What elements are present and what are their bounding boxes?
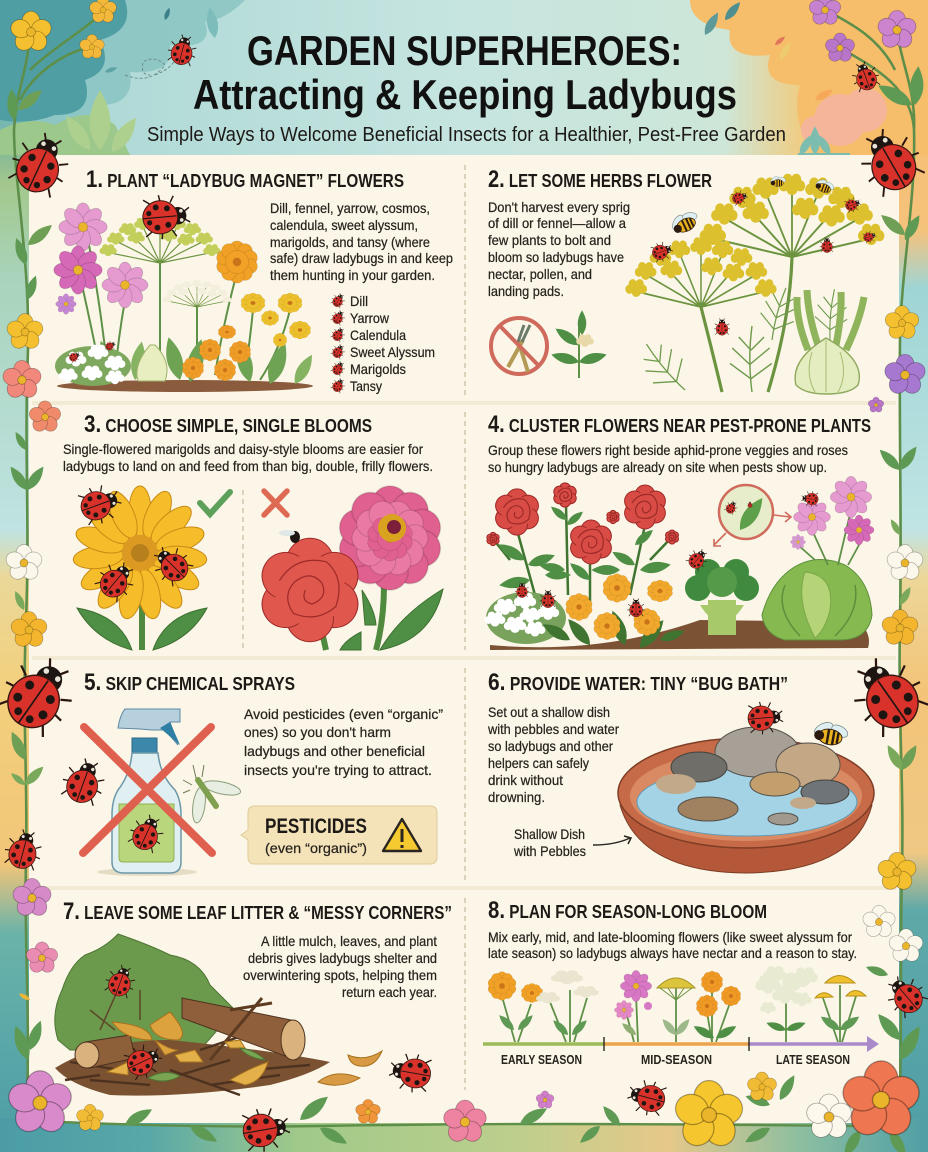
body text 3: ladybugs to land on and feed from than big, double, frilly flowers. [63, 458, 433, 474]
heading 3: 3. CHOOSE SIMPLE, SINGLE BLOOMS [84, 411, 372, 438]
body text 1: Dill, fennel, yarrow, cosmos, [270, 200, 430, 216]
body text 2 [488, 199, 630, 299]
body text 8 [488, 929, 857, 961]
body text 6: drowning. [488, 789, 545, 805]
body text 7: debris gives ladybugs shelter and [248, 950, 437, 966]
body text 6: with pebbles and water [487, 721, 619, 737]
callout: pesticides label [241, 806, 437, 864]
section dividers [464, 165, 466, 1090]
season timeline [483, 1036, 879, 1067]
flower list: Sweet Alyssum [350, 344, 435, 360]
flower list: Tansy [350, 378, 382, 394]
body text 5: insects you're trying to attract. [244, 762, 432, 778]
foliage: top left [0, 0, 245, 156]
panel 5: skip sprays [57, 669, 443, 876]
illustration: early season flowers [487, 970, 599, 1042]
border: bottom vine [60, 1073, 910, 1152]
panel 8: season-long bloom [483, 897, 879, 1067]
season timeline: LATE SEASON [776, 1052, 850, 1067]
body text 2: landing pads. [488, 283, 564, 299]
body text 5: ones) so you don't harm [244, 724, 391, 740]
panel 2: let herbs flower [488, 166, 884, 403]
title: Attracting & Keeping Ladybugs [193, 71, 737, 118]
heading 7: 7. LEAVE SOME LEAF LITTER & “MESSY CORNERS” [63, 898, 452, 925]
body text 8: late season) so ladybugs always have nectar and a reason to stay. [488, 945, 857, 961]
cream content panel [29, 155, 899, 1123]
body text 2: few plants to bolt and [488, 232, 611, 248]
panel 6: provide water [487, 669, 874, 873]
body text 1: marigolds, and tansy (where [270, 234, 430, 250]
body text 6: drink without [488, 772, 563, 788]
body text 1: calendula, sweet alyssum, [270, 217, 418, 233]
body text 4: so hungry ladybugs are already on site when pests show up. [488, 459, 827, 475]
illustration: double blooms [253, 485, 445, 650]
body text 1: them hunting in your garden. [270, 267, 435, 283]
body text 3 [63, 441, 433, 474]
heading 6: 6. PROVIDE WATER: TINY “BUG BATH” [488, 669, 788, 696]
dish label: with Pebbles [513, 843, 586, 859]
illustration: mid season flowers [614, 970, 742, 1042]
flower list: Calendula [350, 327, 406, 343]
illustration: flowering dill and fennel [625, 174, 884, 403]
body text 1 [270, 200, 453, 283]
dish label: Shallow Dish [514, 826, 585, 842]
illustration: spray bottle [97, 709, 197, 876]
illustration: bush and log pile [55, 934, 434, 1096]
body text 7 [243, 933, 437, 1000]
body text 2: Don't harvest every sprig [488, 199, 630, 215]
body text 2: of dill or fennel—allow a [488, 215, 626, 231]
icon: herb sprig [550, 310, 608, 378]
heading 2: 2. LET SOME HERBS FLOWER [488, 166, 712, 193]
heading 1: 1. PLANT “LADYBUG MAGNET” FLOWERS [86, 166, 404, 193]
border: right vine [825, 10, 925, 1090]
dish label [513, 826, 586, 859]
illustration: single yellow bloom [72, 480, 208, 650]
arrow: to broccoli [714, 533, 726, 546]
body text 7: return each year. [342, 984, 437, 1000]
illustration: garden bed [485, 483, 872, 652]
body text 4 [488, 442, 848, 475]
ladybug left of bottle [57, 754, 111, 809]
season timeline: MID-SEASON [641, 1052, 712, 1067]
callout: aphid leaf [719, 485, 773, 539]
body text 5 [244, 706, 443, 778]
panel 7: leaf litter [55, 898, 452, 1096]
body text 6: so ladybugs and other [488, 738, 613, 754]
body text 5: ladybugs and other beneficial [244, 743, 425, 759]
body text 6: helpers can safely [488, 755, 589, 771]
icon: cross mark [264, 491, 287, 515]
illustration: flower bed [54, 193, 317, 392]
icon: no pruning shears [491, 318, 547, 374]
body text 3: Single-flowered marigolds and daisy-style blooms are easier for [63, 441, 423, 457]
border: left vine [6, 10, 105, 1110]
body text 7: A little mulch, leaves, and plant [261, 933, 437, 949]
icon: check mark [200, 492, 230, 514]
icon: red cross [83, 727, 212, 853]
body text 2: nectar, pollen, and [488, 266, 592, 282]
illustration: late season flowers [755, 966, 866, 1042]
title [193, 27, 737, 118]
body text 7: overwintering spots, helping them [243, 967, 437, 983]
panel 3: simple blooms [63, 411, 445, 650]
body text 4: Group these flowers right beside aphid-prone veggies and roses [488, 442, 848, 458]
body text 5: Avoid pesticides (even “organic” [244, 706, 443, 722]
heading 5: 5. SKIP CHEMICAL SPRAYS [84, 669, 295, 696]
subtitle: Simple Ways to Welcome Beneficial Insects for a Healthier, Pest-Free Garden [147, 124, 786, 146]
foliage: top right [690, 0, 928, 157]
flight trail [125, 59, 174, 78]
body text 8: Mix early, mid, and late-blooming flowers (like sweet alyssum for [488, 929, 852, 945]
panel 1: plant magnet flowers [54, 166, 453, 394]
title: GARDEN SUPERHEROES: [247, 27, 682, 74]
dashed divider [242, 490, 244, 648]
arrow: to flowers [774, 512, 791, 522]
flower list: Marigolds [350, 361, 406, 377]
body text 6 [487, 704, 619, 805]
arrow: dish label [593, 836, 631, 845]
illustration: bug bath dish [618, 700, 874, 873]
body text 1: safe) draw ladybugs in and keep [270, 250, 453, 266]
flower list: Dill [350, 293, 368, 309]
flower list [329, 291, 435, 394]
illustration: pink flowers [790, 476, 874, 565]
callout: pesticides label: PESTICIDES [265, 815, 367, 838]
callout: pesticides label: (even “organic”) [265, 840, 367, 856]
panel 4: cluster flowers [485, 411, 874, 652]
season timeline: EARLY SEASON [501, 1052, 582, 1067]
icon: beneficial insect [183, 765, 242, 824]
body text 6: Set out a shallow dish [488, 704, 610, 720]
body text 2: bloom so ladybugs have [488, 249, 624, 265]
flower list: Yarrow [350, 310, 390, 326]
heading 8: 8. PLAN FOR SEASON-LONG BLOOM [488, 897, 767, 924]
